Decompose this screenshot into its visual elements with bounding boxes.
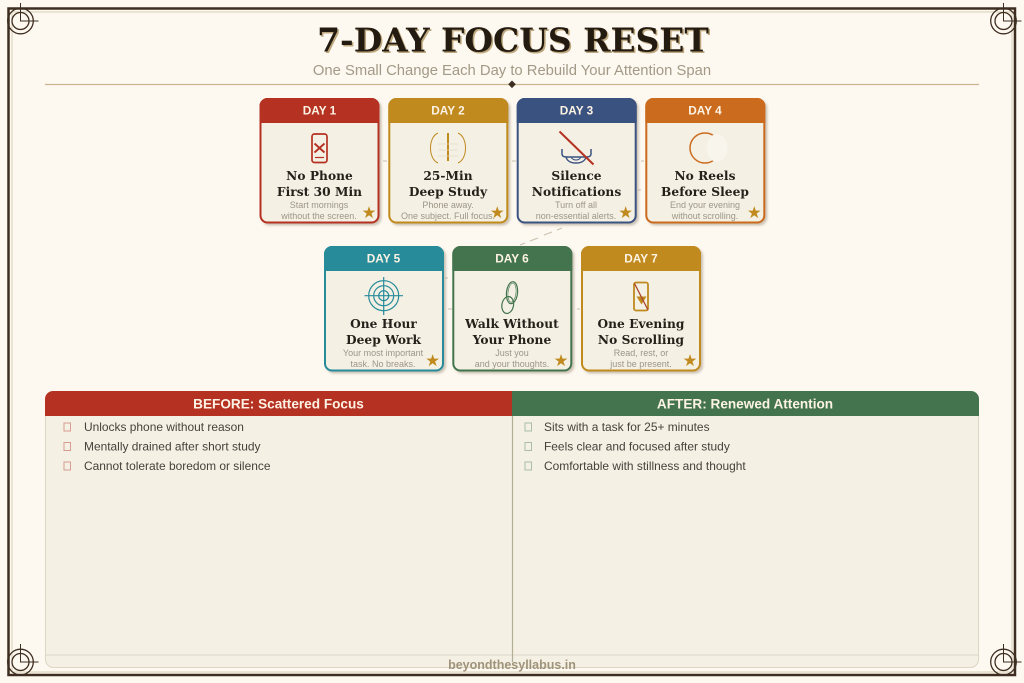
card: day 3: non-essential alerts. <box>536 211 616 221</box>
icon: crossed phone <box>312 134 327 162</box>
card: day 2: Deep Study <box>409 185 488 199</box>
card: day 4: No Reels <box>674 169 736 183</box>
card: day 1: Start mornings <box>290 200 349 210</box>
card: day 1: First 30 Min <box>277 185 362 199</box>
corner ornament top right <box>991 3 1022 34</box>
connectors between cards <box>383 161 644 309</box>
card: day 2: Phone away. <box>422 200 474 210</box>
icon: crescent moon <box>690 133 728 163</box>
card: day 7: No Scrolling <box>598 333 684 347</box>
card: day 7: just be present. <box>609 359 672 369</box>
card: day 7: One Evening <box>597 317 685 331</box>
corner ornament bottom left <box>8 644 38 675</box>
card: day 6 <box>452 246 572 370</box>
card: day 1 <box>260 98 380 222</box>
corner ornament top left <box>8 3 38 34</box>
icon: brain outline <box>430 133 466 163</box>
card: day 3: Silence <box>551 169 602 183</box>
title: 7-DAY FOCUS RESET <box>317 20 709 60</box>
card: day 1: No Phone <box>286 169 353 183</box>
card: day 5: ★ <box>425 351 440 370</box>
card: day 3: Notifications <box>532 185 621 199</box>
card: day 2 <box>388 98 508 222</box>
card: day 3: Turn off all <box>555 200 597 210</box>
card: day 5: task. No breaks. <box>350 359 416 369</box>
after header <box>512 391 979 416</box>
before list: Unlocks phone without reason <box>84 420 244 434</box>
after list <box>525 420 746 473</box>
subtitle: One Small Change Each Day to Rebuild Your Attention Span <box>313 63 711 79</box>
card: day 6: DAY 6 <box>495 252 529 266</box>
card: day 7: Read, rest, or <box>614 348 668 358</box>
card: day 3: ★ <box>618 203 633 222</box>
card: day 2: ★ <box>490 203 505 222</box>
comparison panel <box>45 391 979 668</box>
card: day 7: ★ <box>683 351 697 370</box>
footer credit: beyondthesyllabus.in <box>448 658 576 672</box>
card: day 7 <box>581 246 701 370</box>
after list: Feels clear and focused after study <box>544 440 730 454</box>
icon: footprints <box>501 281 519 314</box>
before header: BEFORE: Scattered Focus <box>193 396 364 412</box>
card: day 4: Before Sleep <box>661 185 749 199</box>
card: day 4 <box>645 98 765 222</box>
card: day 6: and your thoughts. <box>475 359 549 369</box>
after list: Sits with a task for 25+ minutes <box>544 420 710 434</box>
card: day 6: Your Phone <box>472 333 551 347</box>
card: day 2: 25-Min <box>423 169 473 183</box>
card: day 5: One Hour <box>350 317 417 331</box>
card: day 3 <box>517 98 637 222</box>
card: day 1: without the screen. <box>280 211 357 221</box>
after header: AFTER: Renewed Attention <box>657 396 833 412</box>
card: day 5: Deep Work <box>346 333 421 347</box>
card: day 6: ★ <box>554 351 568 370</box>
icon: crossed out phone <box>634 282 648 310</box>
card: day 4: without scrolling. <box>671 211 738 221</box>
card: day 4: End your evening <box>670 200 740 210</box>
icon: silenced bell <box>560 132 594 164</box>
card: day 4: ★ <box>747 203 762 222</box>
card: day 1: DAY 1 <box>303 104 337 118</box>
card: day 3: DAY 3 <box>560 104 594 118</box>
card: day 5: DAY 5 <box>367 252 401 266</box>
card: day 6: Walk Without <box>464 317 559 331</box>
card: day 5 <box>324 246 444 370</box>
card: day 7: DAY 7 <box>624 252 658 266</box>
card: day 4: DAY 4 <box>688 104 722 118</box>
title: 7-DAY FOCUS RESET <box>319 22 711 61</box>
card: day 1: ★ <box>362 203 376 222</box>
before list: Mentally drained after short study <box>84 440 261 454</box>
icon: target <box>364 277 403 315</box>
after list: Comfortable with stillness and thought <box>544 459 746 473</box>
card: day 5: Your most important <box>343 348 424 358</box>
corner ornament bottom right <box>991 644 1022 675</box>
before list: Cannot tolerate boredom or silence <box>84 459 271 473</box>
before header <box>45 391 512 416</box>
before list <box>64 420 271 473</box>
card: day 6: Just you <box>495 348 529 358</box>
card: day 2: One subject. Full focus. <box>401 211 495 221</box>
header divider <box>45 80 979 88</box>
card: day 2: DAY 2 <box>431 104 465 118</box>
